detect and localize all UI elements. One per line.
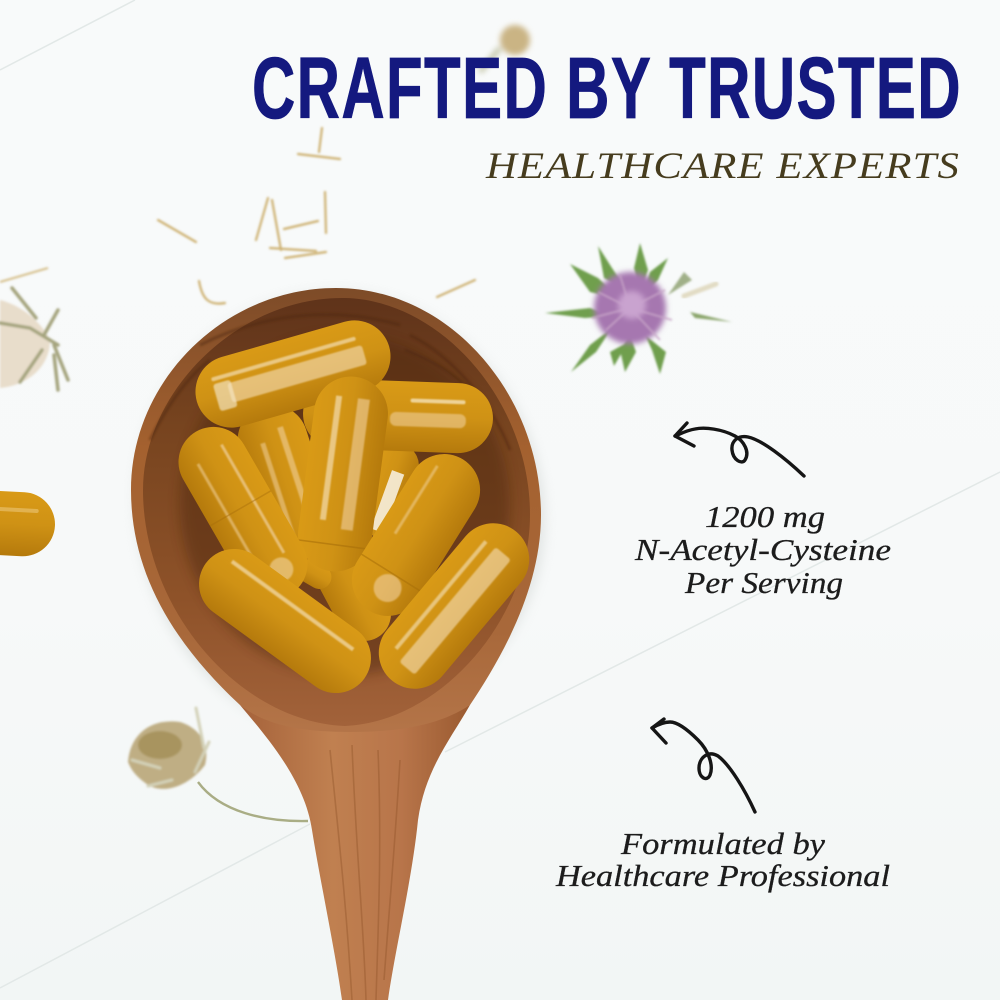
capsule: upper right [302, 378, 494, 454]
dried flower top [480, 25, 530, 72]
spoon bowl [143, 298, 530, 726]
callout text: formulated by [555, 826, 890, 893]
capsule: back left [229, 396, 341, 560]
loose capsule at left edge [0, 489, 57, 558]
capsule: top [187, 312, 399, 436]
callout text: 1200 mg: N-Acetyl-Cysteine [634, 532, 891, 567]
capsule: back below [293, 555, 336, 593]
capsule: centre vertical [294, 372, 392, 576]
arrow: upper callout [675, 423, 804, 476]
capsule: right middle [338, 440, 494, 630]
callout text: 1200 mg: Per Serving [684, 565, 843, 600]
dried flower lower left [128, 708, 308, 821]
subtitle: HEALTHCARE EXPERTS [485, 146, 960, 187]
dried flower left [0, 268, 68, 390]
capsule: bottom left [185, 535, 385, 707]
callout text: formulated by: Healthcare Professional [555, 858, 890, 893]
capsule: back bottom [307, 540, 401, 651]
capsule: bottom right [364, 509, 544, 703]
capsule: left [166, 414, 320, 612]
wooden spoon [131, 288, 545, 1000]
spoon handle [240, 705, 470, 1000]
spoon rim [131, 288, 541, 745]
arrow: lower callout [652, 719, 755, 812]
capsule: back right-centre [351, 437, 425, 543]
thistle flower [545, 243, 732, 374]
dried stems scattered [158, 128, 475, 304]
callout text: 1200 mg [634, 499, 891, 600]
callout text: formulated by: Formulated by [620, 826, 825, 861]
callout text: 1200 mg: 1200 mg [705, 499, 825, 534]
capsules in spoon [166, 312, 544, 707]
spoon shadow [135, 292, 545, 735]
